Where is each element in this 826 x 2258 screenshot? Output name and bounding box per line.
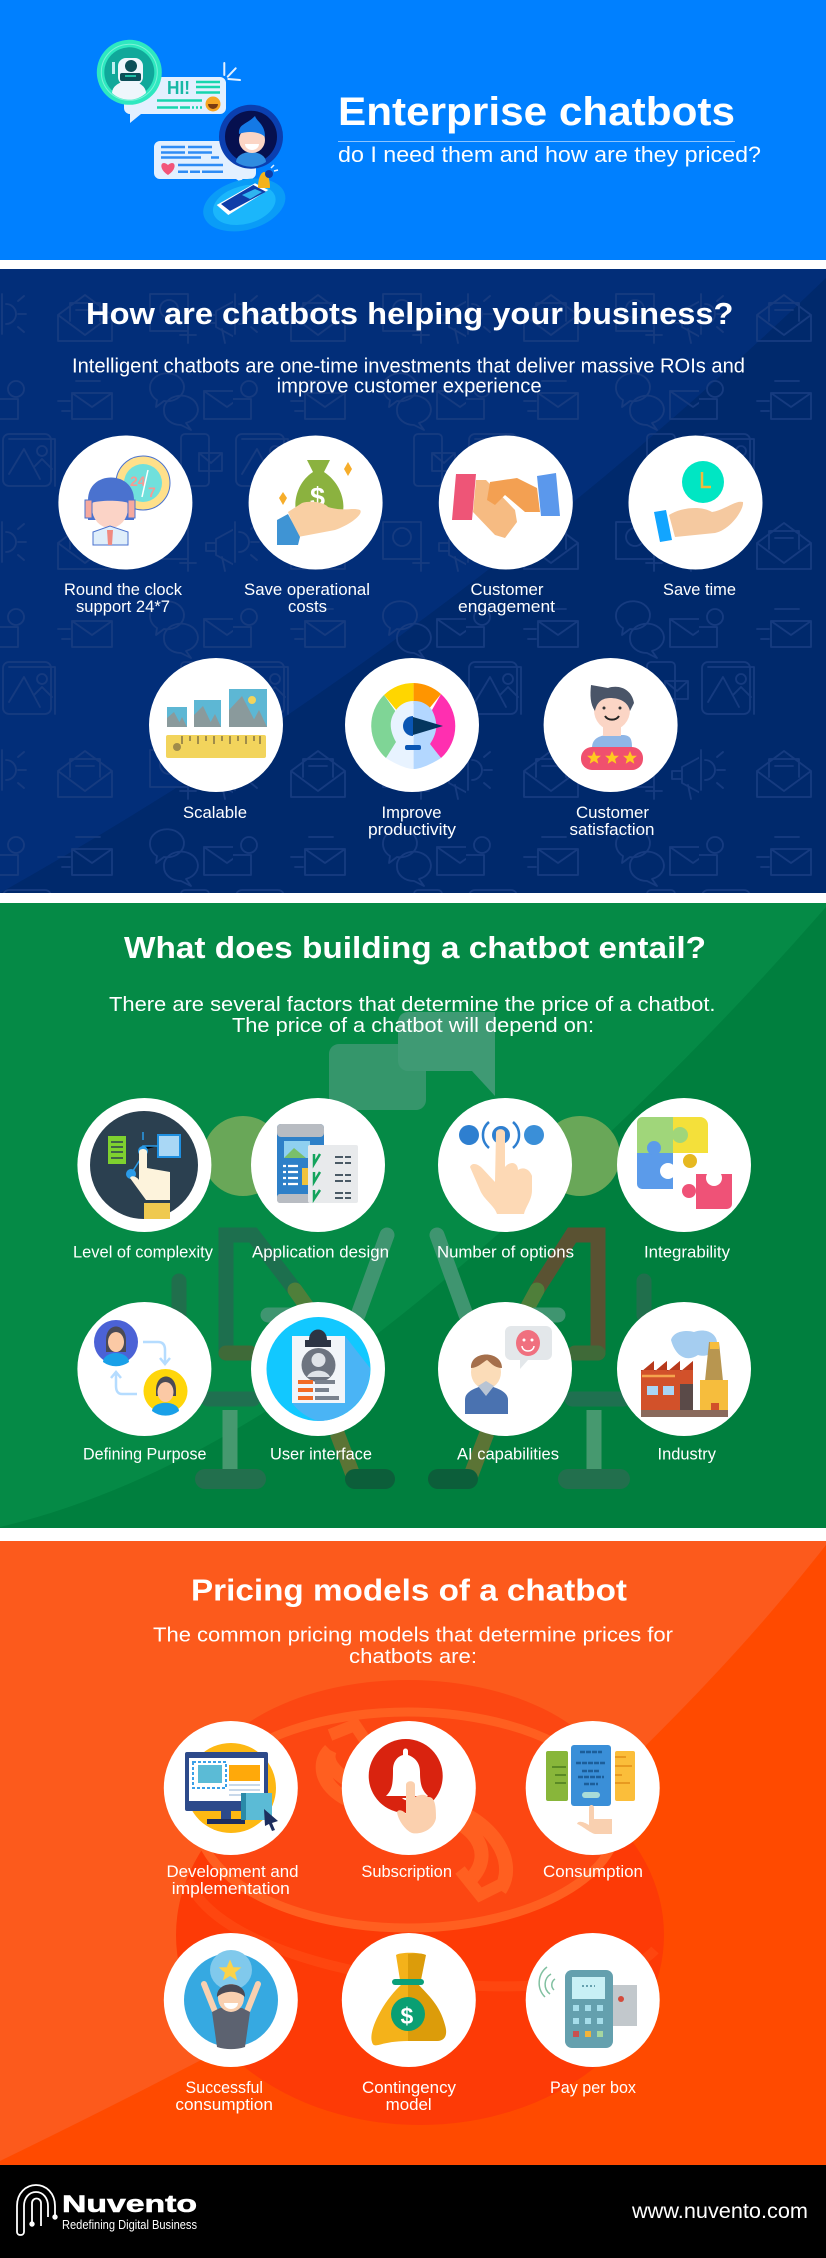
illustration: chat conversation [97,40,291,240]
heading: How are chatbots helping your business? [86,296,734,331]
label: model [386,2096,432,2114]
logo mark [17,2185,57,2235]
item: application design [251,1098,385,1232]
background illustration: two people chatting [179,1012,644,1489]
panel: what does building entail [0,903,826,1528]
title: Enterprise chatbots [338,90,735,134]
label: engagement [458,598,555,616]
label: Integrability [644,1244,731,1262]
item: level of complexity [77,1098,211,1232]
icon: phone with notification [197,165,291,240]
label [362,2079,457,2114]
intro text [72,356,745,398]
label: productivity [368,821,457,839]
label: Level of complexity [73,1244,214,1262]
intro text: improve customer experience [277,376,542,398]
label [244,581,370,616]
item: industry [617,1302,751,1436]
label: support 24*7 [76,598,170,616]
item: save time [628,436,762,570]
item: subscription [342,1721,476,1855]
item: customer satisfaction [544,658,678,792]
label: Customer [576,804,650,822]
label: Customer [470,581,544,599]
label: Improve [382,804,442,822]
label: Application design [252,1244,389,1262]
intro text: The price of a chatbot will depend on: [232,1015,594,1037]
label: consumption [175,2096,273,2114]
logo wordmark: Nuvento [62,2191,197,2218]
item: consumption [526,1721,660,1855]
label: Industry [658,1446,717,1464]
item: customer engagement [439,436,573,570]
label: Successful [186,2079,263,2097]
item: ai capabilities [438,1302,572,1436]
item: contingency model [342,1933,476,2067]
label: User interface [270,1446,372,1464]
label: Round the clock [64,581,183,599]
label: Scalable [183,804,247,822]
item: save operational costs: $ [310,482,325,512]
intro text: chatbots are: [349,1646,477,1668]
label: Save operational [244,581,370,599]
subtitle: do I need them and how are they priced? [338,142,761,167]
label [166,1863,298,1898]
item: successful consumption [164,1933,298,2067]
panel: pricing models [0,1541,826,2165]
chat bubble: bot: HI! [167,78,190,98]
item: improve productivity [345,658,479,792]
intro text: The common pricing models that determine prices for [153,1624,673,1646]
label: Defining Purpose [83,1446,206,1464]
label: Pay per box [550,2079,637,2097]
intro text: There are several factors that determine the price of a chatbot. [109,994,716,1016]
chat bubble: user [154,141,256,187]
label: Number of options [437,1244,574,1262]
avatar: robot [97,40,162,105]
label: Subscription [361,1863,452,1881]
item: development and implementation [164,1721,298,1855]
panel: header [0,0,826,260]
background illustration: stack of coins [176,1680,664,2125]
label [64,581,183,616]
logo tagline: Redefining Digital Business [62,2217,197,2232]
website: www.nuvento.com [631,2200,808,2223]
label [458,581,555,616]
panel: footer [0,2165,826,2258]
item: defining purpose [77,1302,211,1436]
panel: how are chatbots helping [0,269,826,893]
item: save operational costs [249,436,383,570]
item: user interface [251,1302,385,1436]
item: round the clock: 24 [130,473,146,489]
label: Consumption [543,1863,643,1881]
item: contingency model: $ [400,2003,414,2029]
item: round the clock [58,436,192,570]
label: implementation [172,1880,290,1898]
label: AI capabilities [457,1446,559,1464]
label: Contingency [362,2079,457,2097]
item: round the clock: 7 [148,484,156,500]
heading: What does building a chatbot entail? [124,930,706,965]
chat bubble: bot [124,63,240,123]
intro text [109,994,716,1037]
label: costs [288,598,327,616]
heading: Pricing models of a chatbot [191,1572,627,1608]
item: integrability [617,1098,751,1232]
label [368,804,457,839]
label [570,804,654,839]
label [175,2079,273,2114]
item: pay per box [526,1933,660,2067]
intro text [153,1624,673,1668]
label: Save time [663,581,736,599]
item: scalable [149,658,283,792]
label: Development and [166,1863,298,1881]
item: number of options [438,1098,572,1232]
avatar: user [219,105,283,169]
intro text: Intelligent chatbots are one-time investments that deliver massive ROIs and [72,356,745,378]
label: satisfaction [570,821,654,839]
